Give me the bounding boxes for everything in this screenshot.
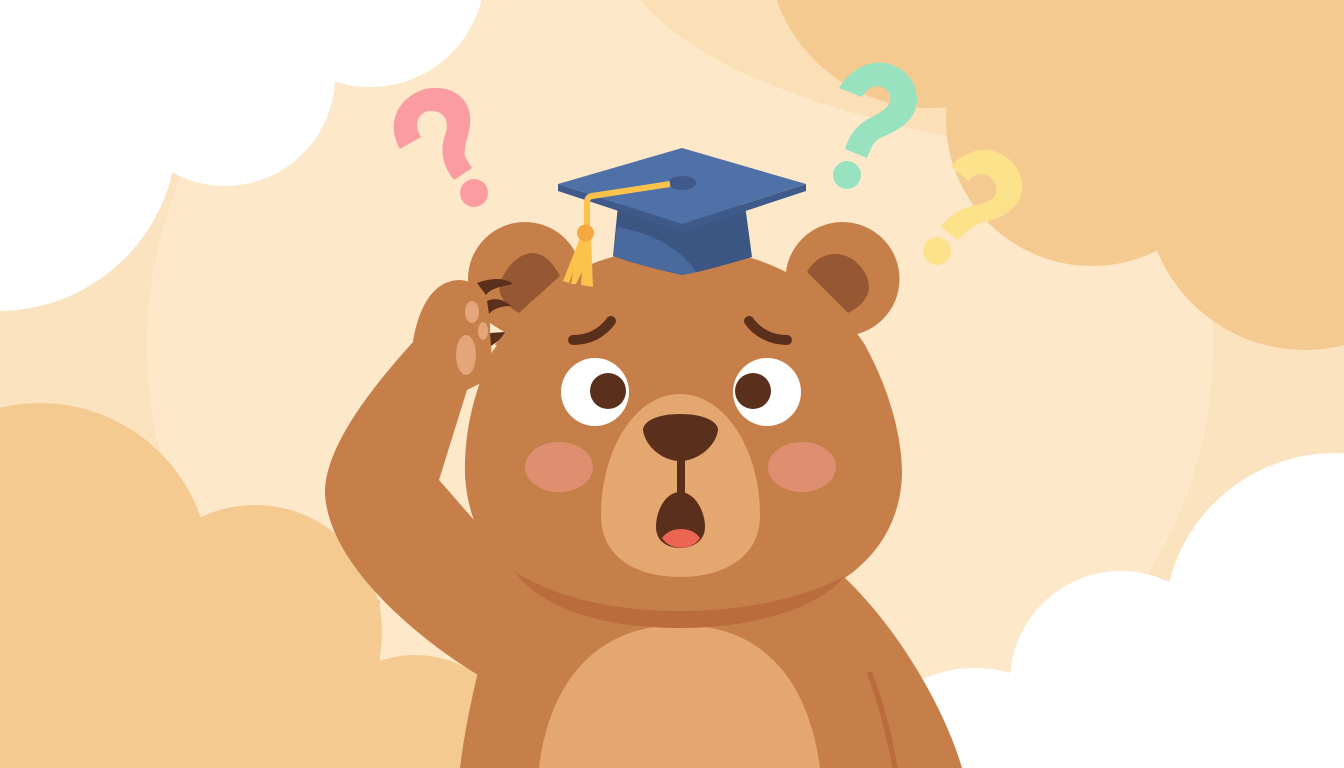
muzzle — [601, 394, 760, 577]
chin shadow — [515, 572, 845, 628]
claws — [477, 279, 513, 346]
philtrum — [677, 458, 685, 494]
eyebrows — [573, 321, 787, 340]
tassel fringe — [563, 238, 593, 287]
bear body — [460, 570, 962, 768]
question mark: pink — [394, 88, 488, 207]
mortarboard — [558, 184, 806, 232]
tassel cord — [587, 184, 670, 232]
left eye — [561, 358, 629, 426]
bear head — [465, 248, 902, 613]
tassel knot — [577, 224, 594, 242]
paw gaps — [490, 323, 504, 352]
mouth — [656, 492, 705, 548]
cloud: top left white — [0, 0, 485, 311]
right eye — [733, 358, 801, 426]
paw pads — [456, 301, 488, 375]
raised arm — [325, 280, 570, 700]
question mark: yellow — [923, 150, 1022, 265]
left ear — [468, 222, 582, 336]
cloud: bottom right white — [845, 453, 1344, 768]
nose — [643, 414, 718, 461]
right ear — [786, 222, 900, 336]
graduation cap — [558, 148, 806, 287]
cap base — [613, 205, 752, 275]
button — [668, 176, 696, 190]
body crease — [870, 674, 895, 768]
cheeks — [525, 442, 836, 492]
bear belly — [539, 625, 820, 768]
cloud: top right tan — [767, 0, 1344, 350]
cloud: bottom left tan — [0, 403, 524, 768]
question mark: green — [833, 62, 917, 189]
